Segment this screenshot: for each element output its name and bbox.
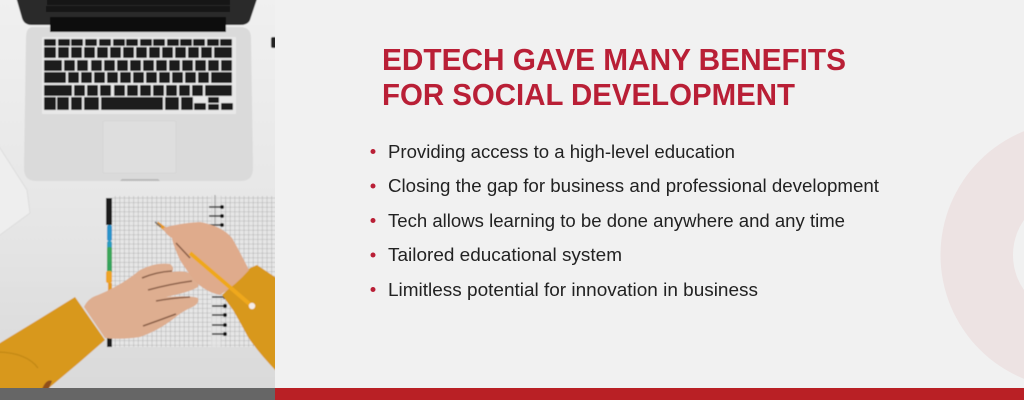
footer bar: grey segment (0, 388, 275, 400)
right sleeve (222, 264, 275, 371)
decorative ring (940, 122, 1024, 388)
laptop base (24, 27, 253, 181)
pencil tip and lead (156, 221, 166, 231)
bullet 4: Tailored educational system (388, 245, 622, 265)
bullet 1: Providing access to a high-level education (388, 142, 735, 162)
notebook (106, 195, 287, 347)
bullet list (370, 142, 879, 300)
right hand (163, 222, 249, 295)
title: FOR SOCIAL DEVELOPMENT (382, 77, 795, 112)
photo: laptop and notebook on desk (0, 0, 275, 388)
hinge (50, 17, 226, 32)
laptop screen keys reflection (46, 0, 230, 12)
panel: right content background (275, 0, 1024, 388)
keyboard (42, 37, 236, 114)
footer bar: red segment (275, 388, 1024, 400)
small black object at right edge (270, 36, 275, 49)
left sleeve (0, 296, 106, 388)
bullet 3: Tech allows learning to be done anywhere and any time (388, 211, 845, 231)
spiral rings (209, 205, 227, 336)
trackpad (103, 121, 176, 173)
title (382, 42, 846, 112)
bullet 2: Closing the gap for business and professional development (388, 176, 879, 196)
paper stack at left edge (0, 224, 10, 233)
left hand (84, 264, 198, 339)
title: EDTECH GAVE MANY BENEFITS (382, 42, 846, 77)
pencil (155, 222, 255, 309)
bullet 5: Limitless potential for innovation in business (388, 280, 758, 300)
laptop screen (14, 0, 260, 25)
